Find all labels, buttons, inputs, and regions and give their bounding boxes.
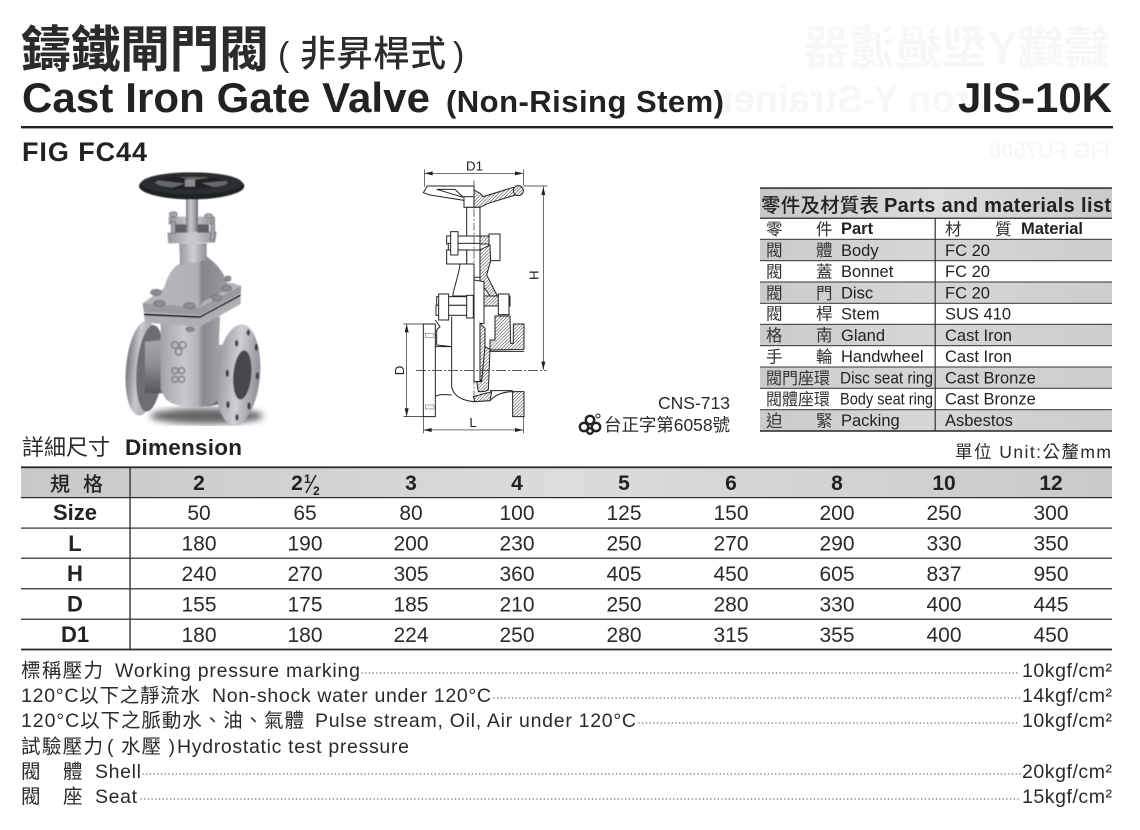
hydrostatic test xyxy=(21,736,409,758)
parts rows: Handwheel xyxy=(841,348,924,366)
title: Chinese: ( xyxy=(278,36,290,74)
parts rows: Cast Bronze xyxy=(945,390,1036,408)
row: D: 155 xyxy=(181,594,217,616)
cross-section drawing xyxy=(392,159,547,433)
flange bolts xyxy=(151,276,232,332)
row: D xyxy=(67,592,1069,616)
row: Size: 50 xyxy=(187,502,211,525)
parts rows: Disc seat ring xyxy=(840,370,933,388)
column heads: Part xyxy=(841,220,874,238)
row: L: 350 xyxy=(1033,532,1069,556)
row: D1: 250 xyxy=(499,624,535,647)
faint show-through text from reverse page: 鑄鐵Y型過濾器 xyxy=(803,22,1110,74)
figure number: FIG FC44 xyxy=(22,137,147,167)
flanges xyxy=(423,324,524,417)
stem xyxy=(186,195,198,232)
parts rows: 門 xyxy=(816,285,832,303)
row: H: 270 xyxy=(287,563,323,586)
title: Chinese xyxy=(21,22,464,78)
parts rows: Body xyxy=(841,242,879,260)
panel: dimension table xyxy=(21,466,1112,650)
row: D1: 355 xyxy=(819,624,855,647)
row: H: 360 xyxy=(499,563,535,586)
seat: 15kgf/cm² xyxy=(1022,786,1112,808)
row: Size: 125 xyxy=(606,502,642,525)
subtitle: non-rising stem: (Non-Rising Stem) xyxy=(446,84,724,119)
connecting pipes xyxy=(145,340,165,393)
row: L: 250 xyxy=(606,532,642,556)
parts rows: 迫 xyxy=(766,412,782,430)
row: D: 185 xyxy=(393,594,429,616)
row: D: D xyxy=(67,592,83,616)
row: L: 230 xyxy=(499,532,535,556)
faint show-through text from reverse page: Iron Y-Strainer xyxy=(719,79,980,121)
dimension L xyxy=(423,415,523,433)
row: nominal size: 2 xyxy=(193,472,205,495)
row: nominal size: 2 xyxy=(313,484,320,498)
row: H: 837 xyxy=(926,563,962,586)
right flange xyxy=(212,323,264,427)
dimension heading: 詳細尺寸 xyxy=(22,435,110,460)
pulse stream xyxy=(21,710,1112,732)
pulse stream: 120°C以下之脈動水、油、氣體 xyxy=(21,710,304,732)
row: nominal size xyxy=(50,472,1063,498)
column heads: 零 xyxy=(766,221,782,239)
disc xyxy=(474,280,490,392)
dimension D1: D1 xyxy=(466,159,483,174)
working pressure xyxy=(21,660,1112,682)
row: nominal size: 規 xyxy=(50,473,70,496)
seat: 閥 xyxy=(21,786,41,808)
row: nominal size: 8 xyxy=(831,472,843,495)
bonnet dome xyxy=(161,257,228,307)
column heads: 件 xyxy=(816,220,832,239)
row: D1: 315 xyxy=(713,624,749,647)
valve body xyxy=(161,317,220,407)
dimension L: L xyxy=(469,415,477,430)
parts rows: Stem xyxy=(841,306,880,324)
dimension D xyxy=(392,324,423,417)
parts rows: 輪 xyxy=(816,348,833,366)
row: D: 445 xyxy=(1033,594,1069,616)
parts rows: Disc xyxy=(841,284,873,302)
bonnet xyxy=(436,245,510,320)
row: D1: 280 xyxy=(606,624,642,647)
row: D1: 450 xyxy=(1033,624,1069,647)
row: Size: 250 xyxy=(926,502,962,525)
parts rows: Bonnet xyxy=(841,263,894,281)
parts rows: 閥門座環 xyxy=(766,369,830,388)
certification: CNS-713: CNS-713 xyxy=(658,393,730,413)
non-shock water: Non-shock water under 120°C xyxy=(212,685,491,707)
row: Size: 150 xyxy=(713,502,749,525)
seat xyxy=(21,786,1112,808)
row: H: H xyxy=(67,561,83,586)
casting marks xyxy=(172,342,186,382)
parts rows: 閥 xyxy=(766,242,782,260)
lower bonnet flange xyxy=(144,296,241,327)
dimension D: D xyxy=(392,366,407,375)
handwheel section xyxy=(423,186,523,207)
parts table heading: Parts and materials list xyxy=(884,195,1111,217)
parts rows: 緊 xyxy=(816,412,832,430)
row: L: 290 xyxy=(819,532,855,556)
title: Chinese: 鑄鐵閘門閥 xyxy=(21,22,269,78)
parts rows: FC 20 xyxy=(945,263,990,281)
working pressure: 10kgf/cm² xyxy=(1022,660,1112,682)
row: nominal size: 1 xyxy=(304,472,311,486)
body xyxy=(435,316,524,402)
row: H: 405 xyxy=(606,563,642,586)
row: D1: D1 xyxy=(61,622,89,647)
parts rows: 閥體座環 xyxy=(766,390,830,409)
row: D: 210 xyxy=(499,594,535,616)
parts rows: 閥 xyxy=(766,285,782,303)
row: Size: 200 xyxy=(819,502,855,525)
dimension heading xyxy=(22,435,242,460)
row: Size xyxy=(53,500,1069,525)
row: L: 180 xyxy=(181,532,217,556)
seat: 座 xyxy=(63,786,83,808)
column heads: Material xyxy=(1021,220,1083,238)
row: Size: Size xyxy=(53,500,97,525)
column heads: 材 xyxy=(945,220,962,239)
dimension H: H xyxy=(526,270,541,280)
parts rows: 閥 xyxy=(766,306,782,324)
row: L: 200 xyxy=(393,532,429,556)
hydrostatic test: Hydrostatic test pressure xyxy=(177,736,409,758)
row: D1: 400 xyxy=(926,624,962,647)
non-shock water: 120°C以下之靜流水 xyxy=(21,685,200,707)
unit note: 單位 Unit:公釐mm xyxy=(955,442,1111,462)
icon: certification flower xyxy=(580,414,600,434)
yoke neck xyxy=(179,243,207,265)
seat: Seat xyxy=(95,786,138,808)
parts rows: 桿 xyxy=(816,304,832,324)
shell: Shell xyxy=(95,761,141,783)
left flange xyxy=(122,320,167,417)
hydrostatic test: 試驗壓力 xyxy=(21,736,103,758)
row: H: 605 xyxy=(819,563,855,586)
centre lines xyxy=(416,181,547,405)
hydrostatic test: ( 水壓 ) xyxy=(107,736,175,758)
shell: 閥 xyxy=(21,761,41,783)
parts rows: FC 20 xyxy=(945,242,990,260)
shell: 體 xyxy=(63,761,83,783)
row: L: L xyxy=(68,531,82,556)
shell: 20kgf/cm² xyxy=(1022,761,1112,783)
parts rows: 蓋 xyxy=(816,262,832,282)
row: H xyxy=(67,561,1069,586)
row: L xyxy=(68,531,1069,556)
row: D: 175 xyxy=(287,594,323,616)
gland xyxy=(167,232,217,243)
panel: parts and materials list xyxy=(760,187,1112,432)
gland bolts xyxy=(169,212,215,240)
parts rows: 體 xyxy=(816,241,832,260)
row: D: 280 xyxy=(713,594,749,616)
parts rows: Body seat ring xyxy=(840,390,933,408)
row: L: 330 xyxy=(926,532,962,556)
row: H: 950 xyxy=(1033,563,1069,586)
row: Size: 100 xyxy=(499,502,535,525)
parts rows: Cast Iron xyxy=(945,348,1012,366)
parts rows: Packing xyxy=(841,412,900,430)
title: Chinese: 非昇桿式 xyxy=(300,33,446,74)
standard label: JIS-10K xyxy=(958,74,1112,121)
faint show-through text from reverse page: FIG FU7500 xyxy=(989,138,1110,163)
row: nominal size: 5 xyxy=(618,472,630,495)
row: nominal size: 10 xyxy=(932,472,956,495)
parts rows: Gland xyxy=(841,327,885,345)
certification mark: 台正字第6058號 xyxy=(604,415,730,435)
parts rows: 手 xyxy=(766,348,782,366)
row: H: 240 xyxy=(181,563,217,586)
shell xyxy=(21,761,1112,783)
row: H: 305 xyxy=(393,563,429,586)
pressure notes xyxy=(21,660,1112,808)
row: nominal size: 2 xyxy=(291,472,303,495)
dimension D1 xyxy=(424,159,523,187)
row: Size: 300 xyxy=(1033,502,1069,525)
gland plate xyxy=(169,217,215,224)
row: H: 450 xyxy=(713,563,749,586)
row: D1: 180 xyxy=(181,624,217,647)
parts rows: Cast Iron xyxy=(945,327,1012,345)
working pressure: Working pressure marking xyxy=(115,660,360,682)
row: nominal size: 3 xyxy=(405,472,417,495)
row: D1 xyxy=(61,622,1069,647)
row: L: 270 xyxy=(713,532,749,556)
working pressure: 標稱壓力 xyxy=(21,660,103,682)
non-shock water xyxy=(21,685,1112,707)
row: Size: 80 xyxy=(399,502,423,525)
gland and bolts xyxy=(447,232,500,264)
row: nominal size: 4 xyxy=(511,472,523,495)
non-shock water: 14kgf/cm² xyxy=(1022,685,1112,707)
pulse stream: Pulse stream, Oil, Air under 120°C xyxy=(315,710,636,732)
pulse stream: 10kgf/cm² xyxy=(1022,710,1112,732)
parts rows: 閥 xyxy=(766,264,782,282)
stem xyxy=(467,207,480,277)
column heads xyxy=(766,220,1083,239)
parts rows: Asbestos xyxy=(945,412,1013,430)
row: nominal size: 6 xyxy=(725,472,737,495)
row: D: 330 xyxy=(819,594,855,616)
title: English: Cast Iron Gate Valve xyxy=(22,74,430,121)
parts table heading: 零件及材質表 xyxy=(761,195,879,217)
row: D1: 224 xyxy=(393,624,429,647)
parts rows xyxy=(766,241,1036,430)
row: Size: 65 xyxy=(293,502,317,525)
upper bonnet flange xyxy=(143,283,241,315)
dimension heading: Dimension xyxy=(125,435,242,460)
parts rows: FC 20 xyxy=(945,284,990,302)
faint show-through text from reverse page xyxy=(719,22,1110,163)
dimension H xyxy=(523,186,547,370)
parts rows: 格 xyxy=(766,326,783,345)
parts rows: Cast Bronze xyxy=(945,370,1036,388)
row: D1: 180 xyxy=(287,624,323,647)
row: nominal size: 格 xyxy=(83,473,103,496)
title: Chinese: ) xyxy=(453,36,464,74)
valve photo xyxy=(122,172,264,427)
row: L: 190 xyxy=(287,532,323,556)
row: nominal size: 12 xyxy=(1039,472,1063,495)
row: D: 400 xyxy=(926,594,962,616)
parts rows: SUS 410 xyxy=(945,306,1011,324)
column heads: 質 xyxy=(995,220,1012,239)
parts table heading xyxy=(761,195,1111,217)
row: D: 250 xyxy=(606,594,642,616)
handwheel xyxy=(139,172,244,199)
parts rows: 南 xyxy=(816,326,832,345)
